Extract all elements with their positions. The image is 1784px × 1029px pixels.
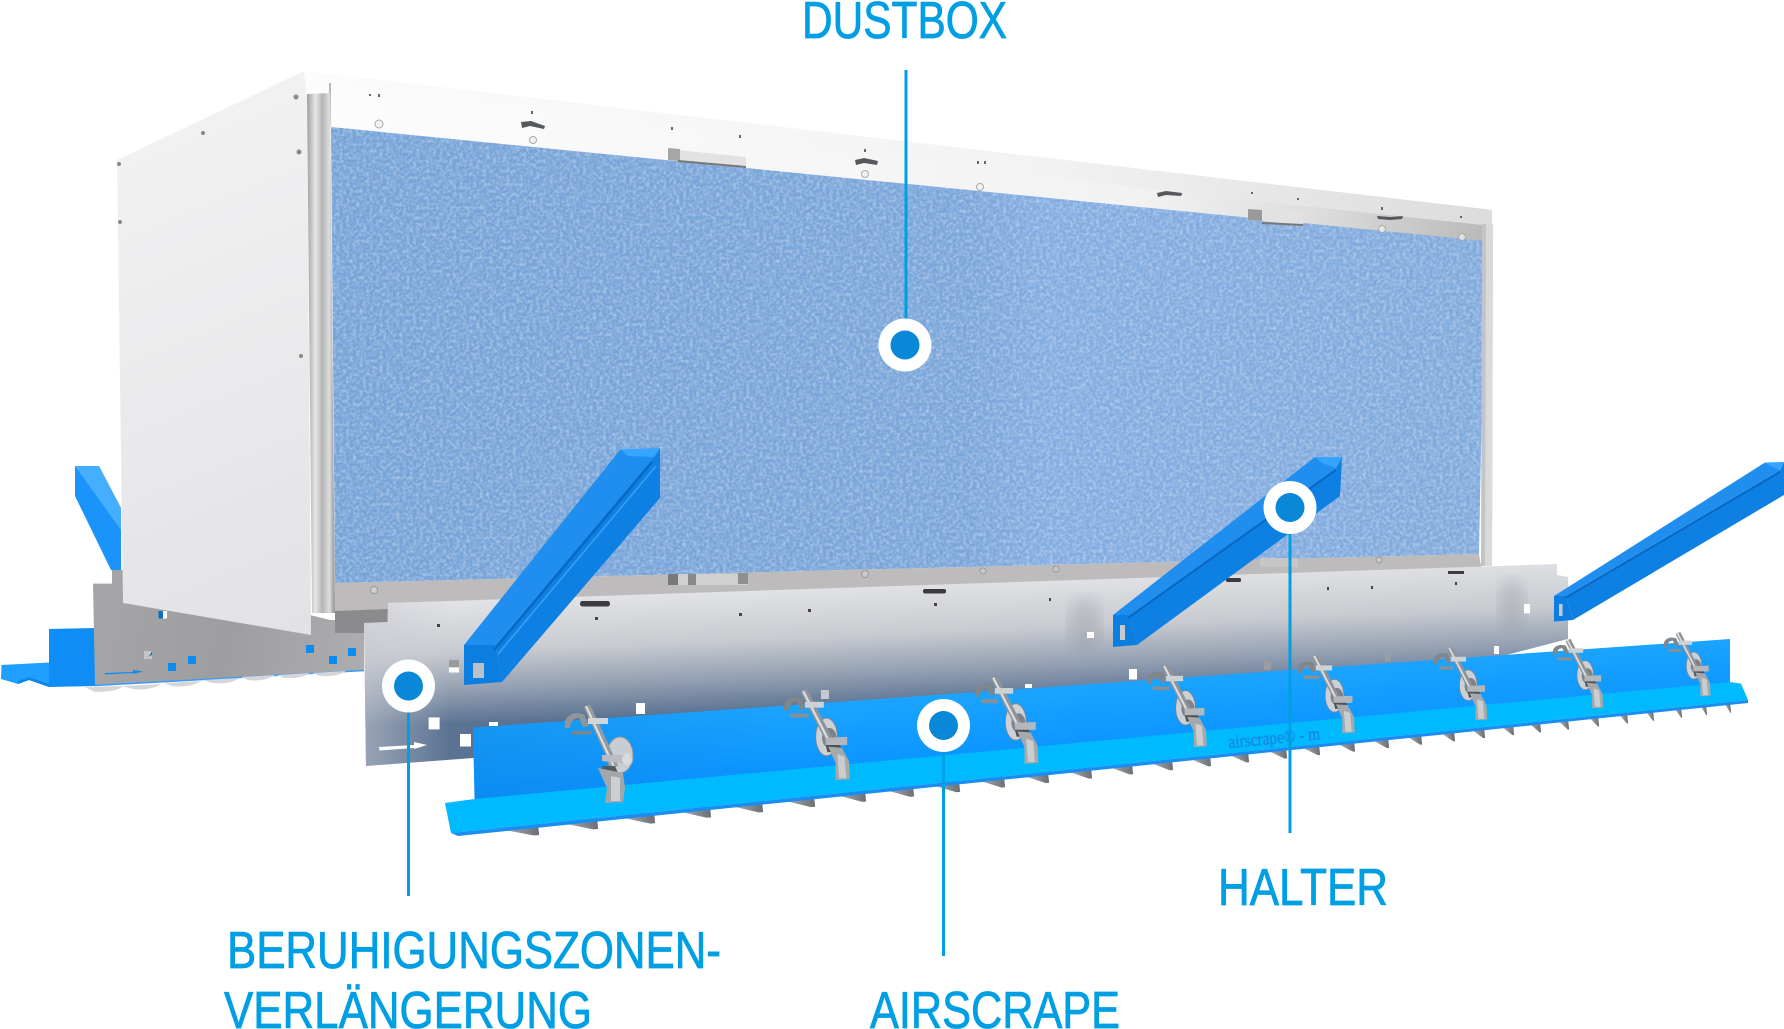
callout line: beruhigungszonen bbox=[407, 700, 410, 896]
halter 2 bbox=[1113, 457, 1342, 647]
callout line: airscrape bbox=[942, 740, 945, 956]
marker: dustbox bbox=[878, 318, 932, 372]
airscrape logo text: airscrape® - m bbox=[1227, 723, 1321, 752]
dustbox lower frame strip bbox=[335, 554, 1485, 633]
halter 3 bbox=[1554, 462, 1784, 622]
label: beruhigungszonen-verlängerung: BERUHIGUNGSZONEN- bbox=[227, 922, 721, 980]
callout line: halter bbox=[1288, 520, 1292, 833]
beruhigungszonen extension plate bbox=[364, 564, 1568, 766]
dustbox blue filter panel bbox=[331, 127, 1485, 583]
halter 1 bbox=[464, 448, 660, 685]
airscrape teeth bbox=[496, 702, 1731, 839]
airscrape bbox=[445, 639, 1748, 839]
airscrape clamps bbox=[565, 633, 1711, 803]
label: halter: HALTER bbox=[1218, 859, 1388, 917]
airscrape back wall bbox=[473, 639, 1730, 801]
airscrape front flange bbox=[445, 682, 1748, 833]
left distant parts: second halter and airscrape bbox=[1, 466, 121, 687]
dustbox corner trims bbox=[307, 93, 1493, 613]
marker: halter bbox=[1264, 481, 1316, 534]
dustbox side panel bbox=[117, 71, 311, 635]
dustbox hardware: brackets and latches bbox=[369, 94, 1466, 240]
dustbox housing bbox=[117, 71, 1493, 635]
label: beruhigungszonen-verlängerung bbox=[224, 922, 721, 1029]
callout line: dustbox bbox=[904, 70, 908, 330]
marker: beruhigungszonen bbox=[382, 660, 435, 712]
left back plate bbox=[85, 570, 364, 692]
marker: airscrape bbox=[917, 699, 970, 752]
dustbox top white band bbox=[304, 71, 1492, 245]
